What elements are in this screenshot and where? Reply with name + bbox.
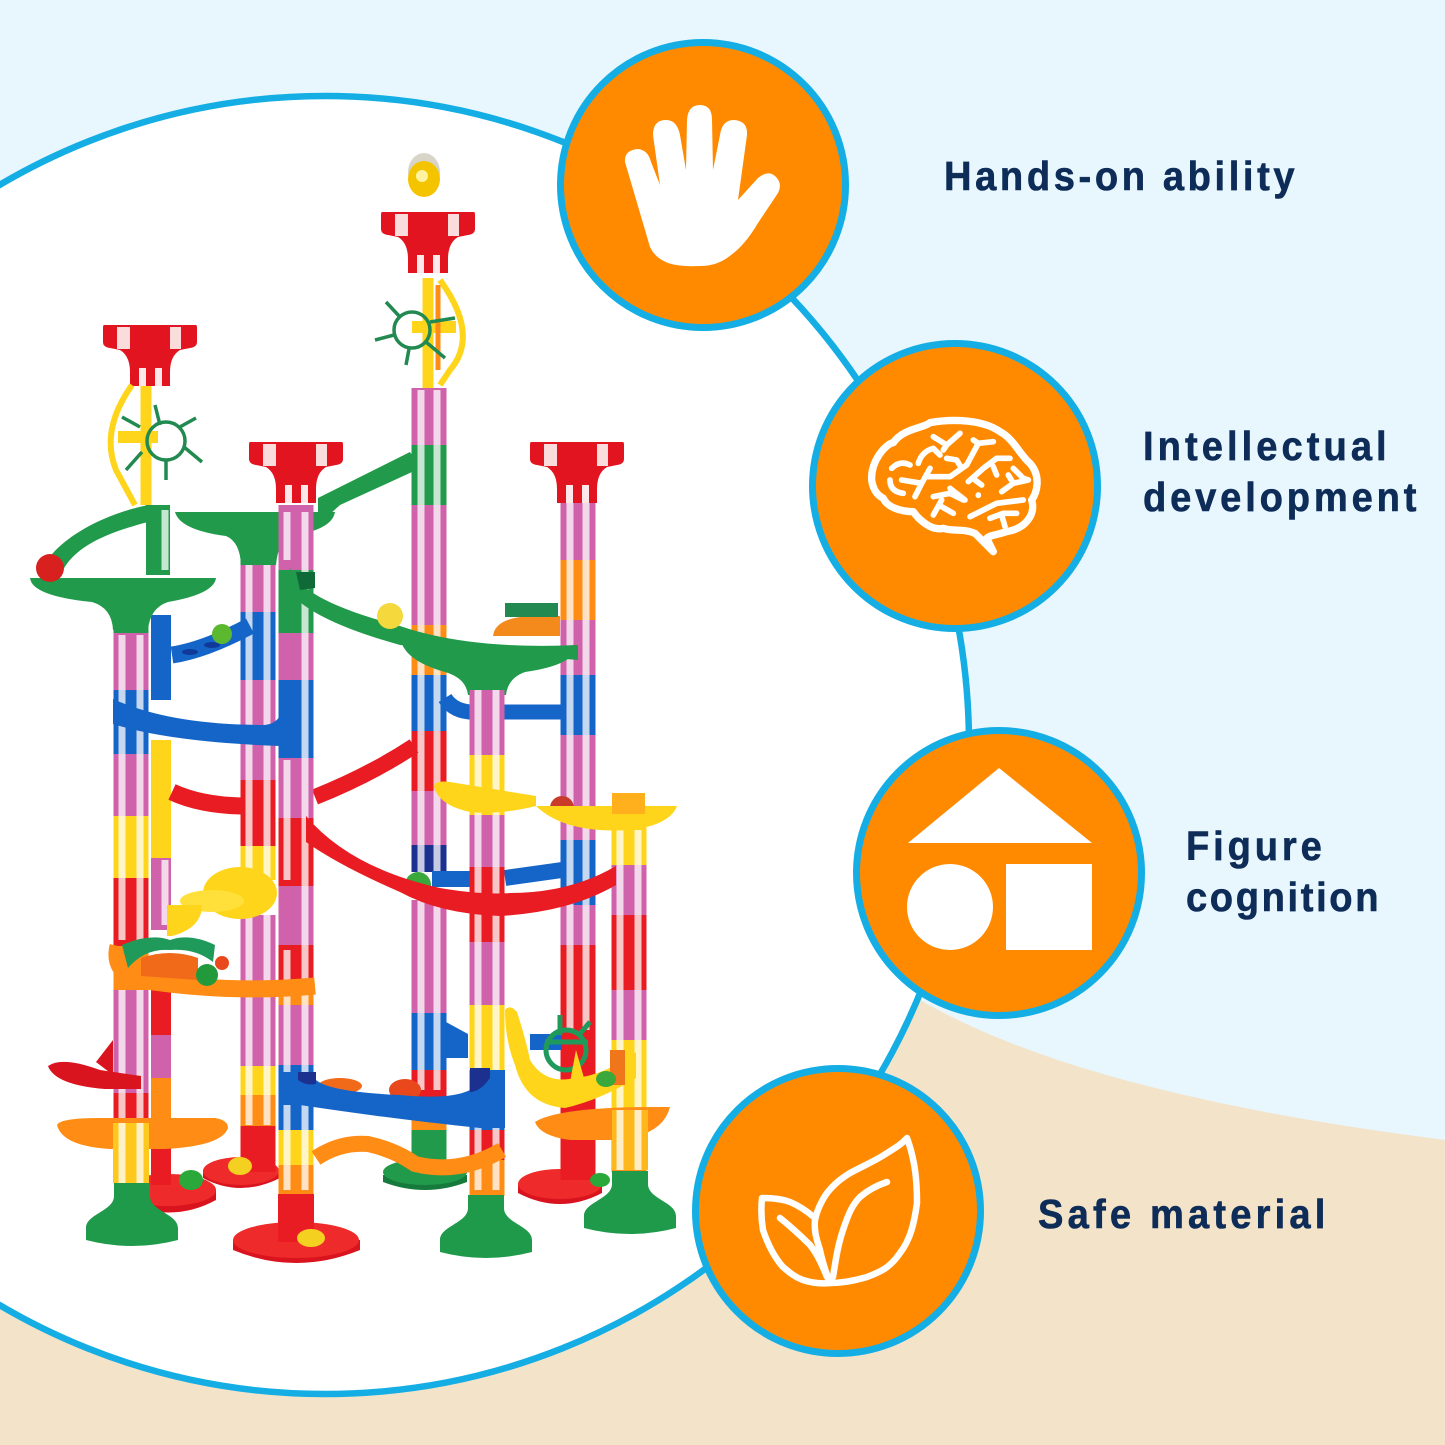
lower right orange platform (535, 1107, 670, 1140)
blue ramp: lower (279, 1068, 505, 1128)
label: figure cognition: cognition (1186, 875, 1379, 920)
badge: figure cognition (856, 730, 1142, 1016)
orange box on front right pillar (610, 1050, 625, 1085)
blue connector behind wheel (530, 1034, 562, 1050)
base: green front center (440, 1195, 532, 1258)
toy: green wheel (545, 1015, 590, 1070)
marble: red (36, 554, 64, 582)
orange platform left (57, 1118, 228, 1149)
label: safe material: Safe material (1038, 1192, 1325, 1237)
label: figure cognition (1186, 824, 1379, 920)
yellow spiral left (167, 867, 277, 936)
icon: hand (625, 105, 780, 266)
red ramp: center (315, 746, 414, 797)
icon: shapes (907, 768, 1092, 950)
pinwheel: top (375, 278, 463, 388)
badge: intellectual development (812, 344, 1098, 628)
label: hands-on ability: Hands-on ability (944, 154, 1295, 199)
marble: red on yellow (550, 796, 574, 820)
funnel: top center (381, 212, 475, 273)
funnel: upper left (103, 325, 197, 386)
back bases (120, 1157, 602, 1212)
base: red front center (233, 1194, 360, 1263)
badge: safe material (696, 1068, 980, 1354)
yellow pillar front right (612, 1110, 648, 1170)
blue ramp: right lower (432, 870, 562, 879)
product illustration: marble run toy (30, 153, 677, 1263)
red spoon (48, 1040, 141, 1089)
base: green front right (584, 1171, 676, 1234)
orange S-ramp (316, 1144, 502, 1167)
pinwheel: left (111, 385, 202, 505)
background: tan ground (0, 1000, 1445, 1445)
yellow banana ramp (505, 1007, 636, 1108)
icon: leaves (761, 1138, 917, 1283)
marble: green on chain (212, 624, 232, 644)
funnel: center (249, 442, 343, 503)
blue ramp: right upper (445, 698, 562, 712)
orange piece behind blue ramp (318, 1078, 362, 1094)
red ramp: large swoop (306, 816, 616, 916)
marbles on bases (179, 1071, 616, 1190)
funnel: right (530, 442, 624, 503)
label: intellectual development: Intellectual (1143, 424, 1387, 469)
red ramp: left (172, 792, 241, 806)
yellow pillar over orange platform (113, 1123, 149, 1183)
back pillars (158, 388, 586, 1185)
marble: green behind red ramp (405, 872, 431, 898)
marble: orange behind ramp (389, 1079, 421, 1101)
label: intellectual development: development (1143, 475, 1416, 520)
white product circle (0, 96, 969, 1394)
badge: hands-on ability (560, 42, 846, 328)
yellow platforms (434, 782, 677, 830)
icon: brain (872, 420, 1037, 552)
label: intellectual development (1143, 424, 1416, 520)
label: figure cognition: Figure (1186, 824, 1322, 869)
front left pillars (122, 505, 305, 1240)
blue chain ramp (172, 626, 250, 655)
top falling marble (408, 153, 440, 197)
orange ramp with toy (117, 937, 315, 989)
green ramp: middle with platform (288, 568, 578, 695)
blue side connector (446, 1022, 468, 1058)
base: green front left (86, 1183, 178, 1246)
marble: yellow on green ramp (377, 603, 403, 629)
right pillars (478, 690, 638, 1196)
green ramps and platforms (30, 452, 412, 630)
toy: orange dome top right (493, 603, 560, 636)
blue ramp: upper (113, 690, 298, 746)
